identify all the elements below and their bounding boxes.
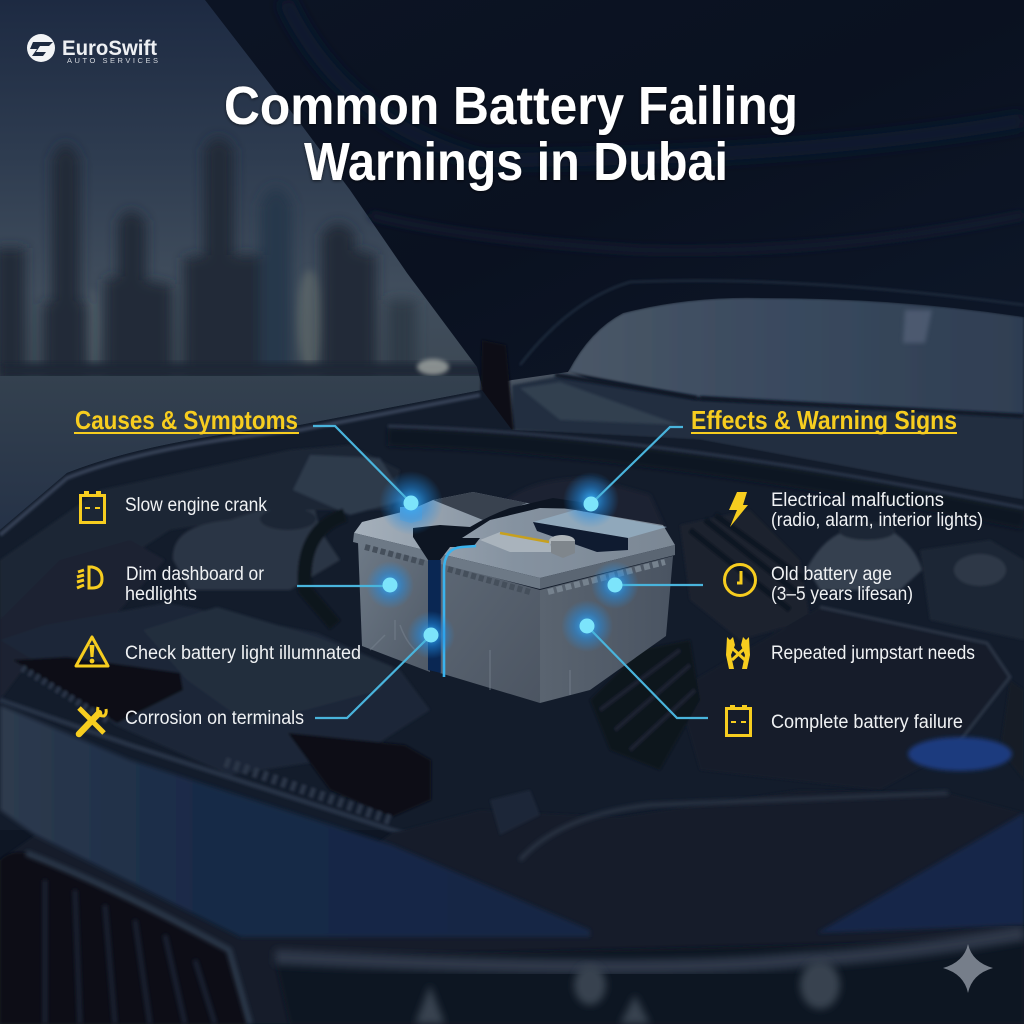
icon: lightning bolt xyxy=(729,492,748,527)
icon: battery xyxy=(80,491,104,522)
icon: clock xyxy=(724,564,756,596)
logo: EuroSwift Auto Services xyxy=(27,34,158,65)
callout lines and nodes xyxy=(297,426,708,718)
logo: EuroSwift Auto Services: AUTO SERVICES xyxy=(67,56,158,65)
car battery xyxy=(353,478,675,703)
icon: dim headlight xyxy=(77,567,102,588)
label: old battery age: Old battery age xyxy=(771,564,892,585)
heading: causes and symptoms: Causes & Symptoms xyxy=(75,405,298,435)
icon: sparkle watermark xyxy=(943,944,993,993)
label: corrosion on terminals: Corrosion on terminals xyxy=(125,708,304,729)
label: slow engine crank: Slow engine crank xyxy=(125,495,267,516)
label: old battery age: (3–5 years lifesan) xyxy=(771,584,913,605)
background: front of car xyxy=(0,705,1024,1024)
background: windshield and cowl xyxy=(500,298,1024,500)
label: electrical malfunctions xyxy=(771,490,983,531)
panel: effects and warning signs xyxy=(691,405,983,736)
title: Common Battery Failing xyxy=(224,76,798,136)
label: electrical malfunctions: Electrical malfuctions xyxy=(771,490,944,511)
battery ribs xyxy=(370,620,570,695)
label: dim dashboard or headlights: Dim dashboard or xyxy=(126,564,265,585)
background: blurred Dubai skyline xyxy=(0,0,560,530)
icon: failed battery xyxy=(726,705,750,736)
label: complete battery failure: Complete battery failure xyxy=(771,712,963,733)
battery lids xyxy=(433,492,667,552)
title xyxy=(224,76,798,192)
logo mark xyxy=(27,34,55,62)
water edge xyxy=(0,376,490,530)
black cable strap xyxy=(413,498,587,673)
background: engine bay xyxy=(0,390,1024,840)
background: open hood xyxy=(205,0,1024,440)
battery terminals xyxy=(400,507,575,558)
logo: EuroSwift Auto Services: EuroSwift xyxy=(62,37,157,60)
label: dim dashboard or headlights: hedlights xyxy=(125,584,197,605)
label: old battery age xyxy=(771,564,913,605)
panel: causes and symptoms xyxy=(74,405,361,734)
icon: jumper clamps xyxy=(726,637,750,669)
glow line xyxy=(444,546,476,677)
label: electrical malfunctions: (radio, alarm, interior lights) xyxy=(771,510,983,531)
icon: crossed tools xyxy=(79,707,106,734)
label: dim dashboard or headlights xyxy=(125,564,265,605)
icon: warning triangle xyxy=(76,637,108,666)
title: Warnings in Dubai xyxy=(304,132,728,192)
label: check battery light: Check battery light illumnated xyxy=(125,643,361,664)
heading: effects and warning signs: Effects & Warning Signs xyxy=(691,405,957,435)
label: repeated jumpstart needs: Repeated jumpstart needs xyxy=(771,643,975,664)
